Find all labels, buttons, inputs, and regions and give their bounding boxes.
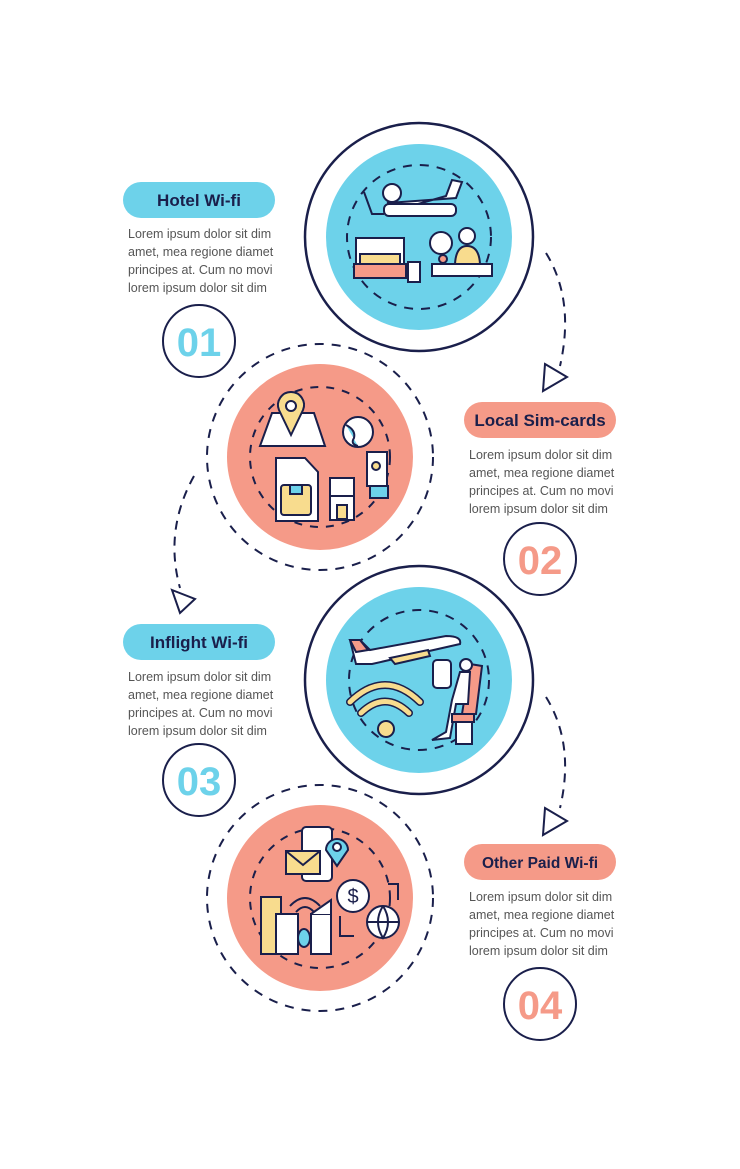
text block: step 1 description: Lorem ipsum dolor sit dim bbox=[128, 227, 271, 241]
text block: step 2 description: lorem ipsum dolor sit dim bbox=[469, 502, 608, 516]
text block: step 1 description: principes at. Cum no movi bbox=[128, 263, 273, 277]
heading: Inflight Wi-fi: Inflight Wi-fi bbox=[150, 633, 248, 652]
icon: city buildings with wifi bbox=[261, 897, 331, 954]
icon: globe bbox=[343, 417, 373, 447]
number: 02 bbox=[504, 523, 576, 595]
icon: map with pin bbox=[260, 392, 325, 446]
icon: luggage bbox=[330, 478, 354, 520]
icon: dollar coin and www globe bbox=[337, 880, 399, 938]
arrow: step 3 to step 4 bbox=[543, 697, 567, 835]
text block: step 2 description: amet, mea regione diamet bbox=[469, 466, 615, 480]
heading: Inflight Wi-fi bbox=[123, 624, 275, 660]
arrow: step 1 to step 2 bbox=[543, 253, 567, 391]
heading: Other Paid Wi-fi: Other Paid Wi-fi bbox=[482, 855, 598, 872]
icon: passenger in seat bbox=[432, 659, 482, 744]
text block: step 4 description: Lorem ipsum dolor sit dim bbox=[469, 890, 612, 904]
panel: step 4 other paid wi-fi circle bbox=[207, 785, 433, 1011]
icon: dollar coin and www globe: $ bbox=[347, 886, 359, 908]
text block: step 2 description bbox=[469, 448, 615, 516]
heading: Hotel Wi-fi bbox=[123, 182, 275, 218]
heading: Other Paid Wi-fi bbox=[464, 844, 616, 880]
text block: step 3 description: amet, mea regione diamet bbox=[128, 688, 274, 702]
icon: bed and nightstand bbox=[354, 238, 420, 282]
text block: step 3 description: lorem ipsum dolor sit dim bbox=[128, 724, 267, 738]
text block: step 3 description: principes at. Cum no movi bbox=[128, 706, 273, 720]
panel: step 3 inflight wi-fi circle bbox=[305, 566, 533, 794]
icon: airplane bbox=[350, 636, 460, 664]
panel: step 1 hotel wi-fi circle bbox=[305, 123, 533, 351]
text block: step 1 description: amet, mea regione diamet bbox=[128, 245, 274, 259]
text block: step 4 description bbox=[469, 890, 615, 958]
text block: step 4 description: amet, mea regione diamet bbox=[469, 908, 615, 922]
text block: step 1 description: lorem ipsum dolor sit dim bbox=[128, 281, 267, 295]
number: 04 bbox=[504, 968, 576, 1040]
text block: step 4 description: principes at. Cum no movi bbox=[469, 926, 614, 940]
icon: sim card bbox=[276, 458, 318, 521]
heading: Local Sim-cards bbox=[464, 402, 616, 438]
number: 01: 01 bbox=[177, 321, 221, 365]
icon: wi-fi signal bbox=[350, 685, 420, 713]
text block: step 1 description bbox=[128, 227, 274, 295]
icon: phone with envelope and pin bbox=[286, 827, 348, 881]
text block: step 3 description bbox=[128, 670, 274, 738]
number: 04: 04 bbox=[518, 984, 563, 1028]
icon: reception desk with wifi bbox=[430, 228, 492, 276]
text block: step 4 description: lorem ipsum dolor sit dim bbox=[469, 944, 608, 958]
number: 03: 03 bbox=[177, 760, 221, 804]
text block: step 2 description: Lorem ipsum dolor sit dim bbox=[469, 448, 612, 462]
heading: Local Sim-cards: Local Sim-cards bbox=[474, 411, 606, 430]
text block: step 3 description: Lorem ipsum dolor sit dim bbox=[128, 670, 271, 684]
icon: passport in hand bbox=[367, 452, 388, 498]
heading: Hotel Wi-fi: Hotel Wi-fi bbox=[157, 191, 241, 210]
text block: step 2 description: principes at. Cum no movi bbox=[469, 484, 614, 498]
number: 01 bbox=[163, 305, 235, 377]
arrow: step 2 to step 3 bbox=[172, 476, 195, 613]
panel: step 2 local sim-cards circle bbox=[207, 344, 433, 570]
icon: person with laptop on bed bbox=[364, 180, 462, 216]
number: 02: 02 bbox=[518, 539, 562, 583]
number: 03 bbox=[163, 744, 235, 816]
